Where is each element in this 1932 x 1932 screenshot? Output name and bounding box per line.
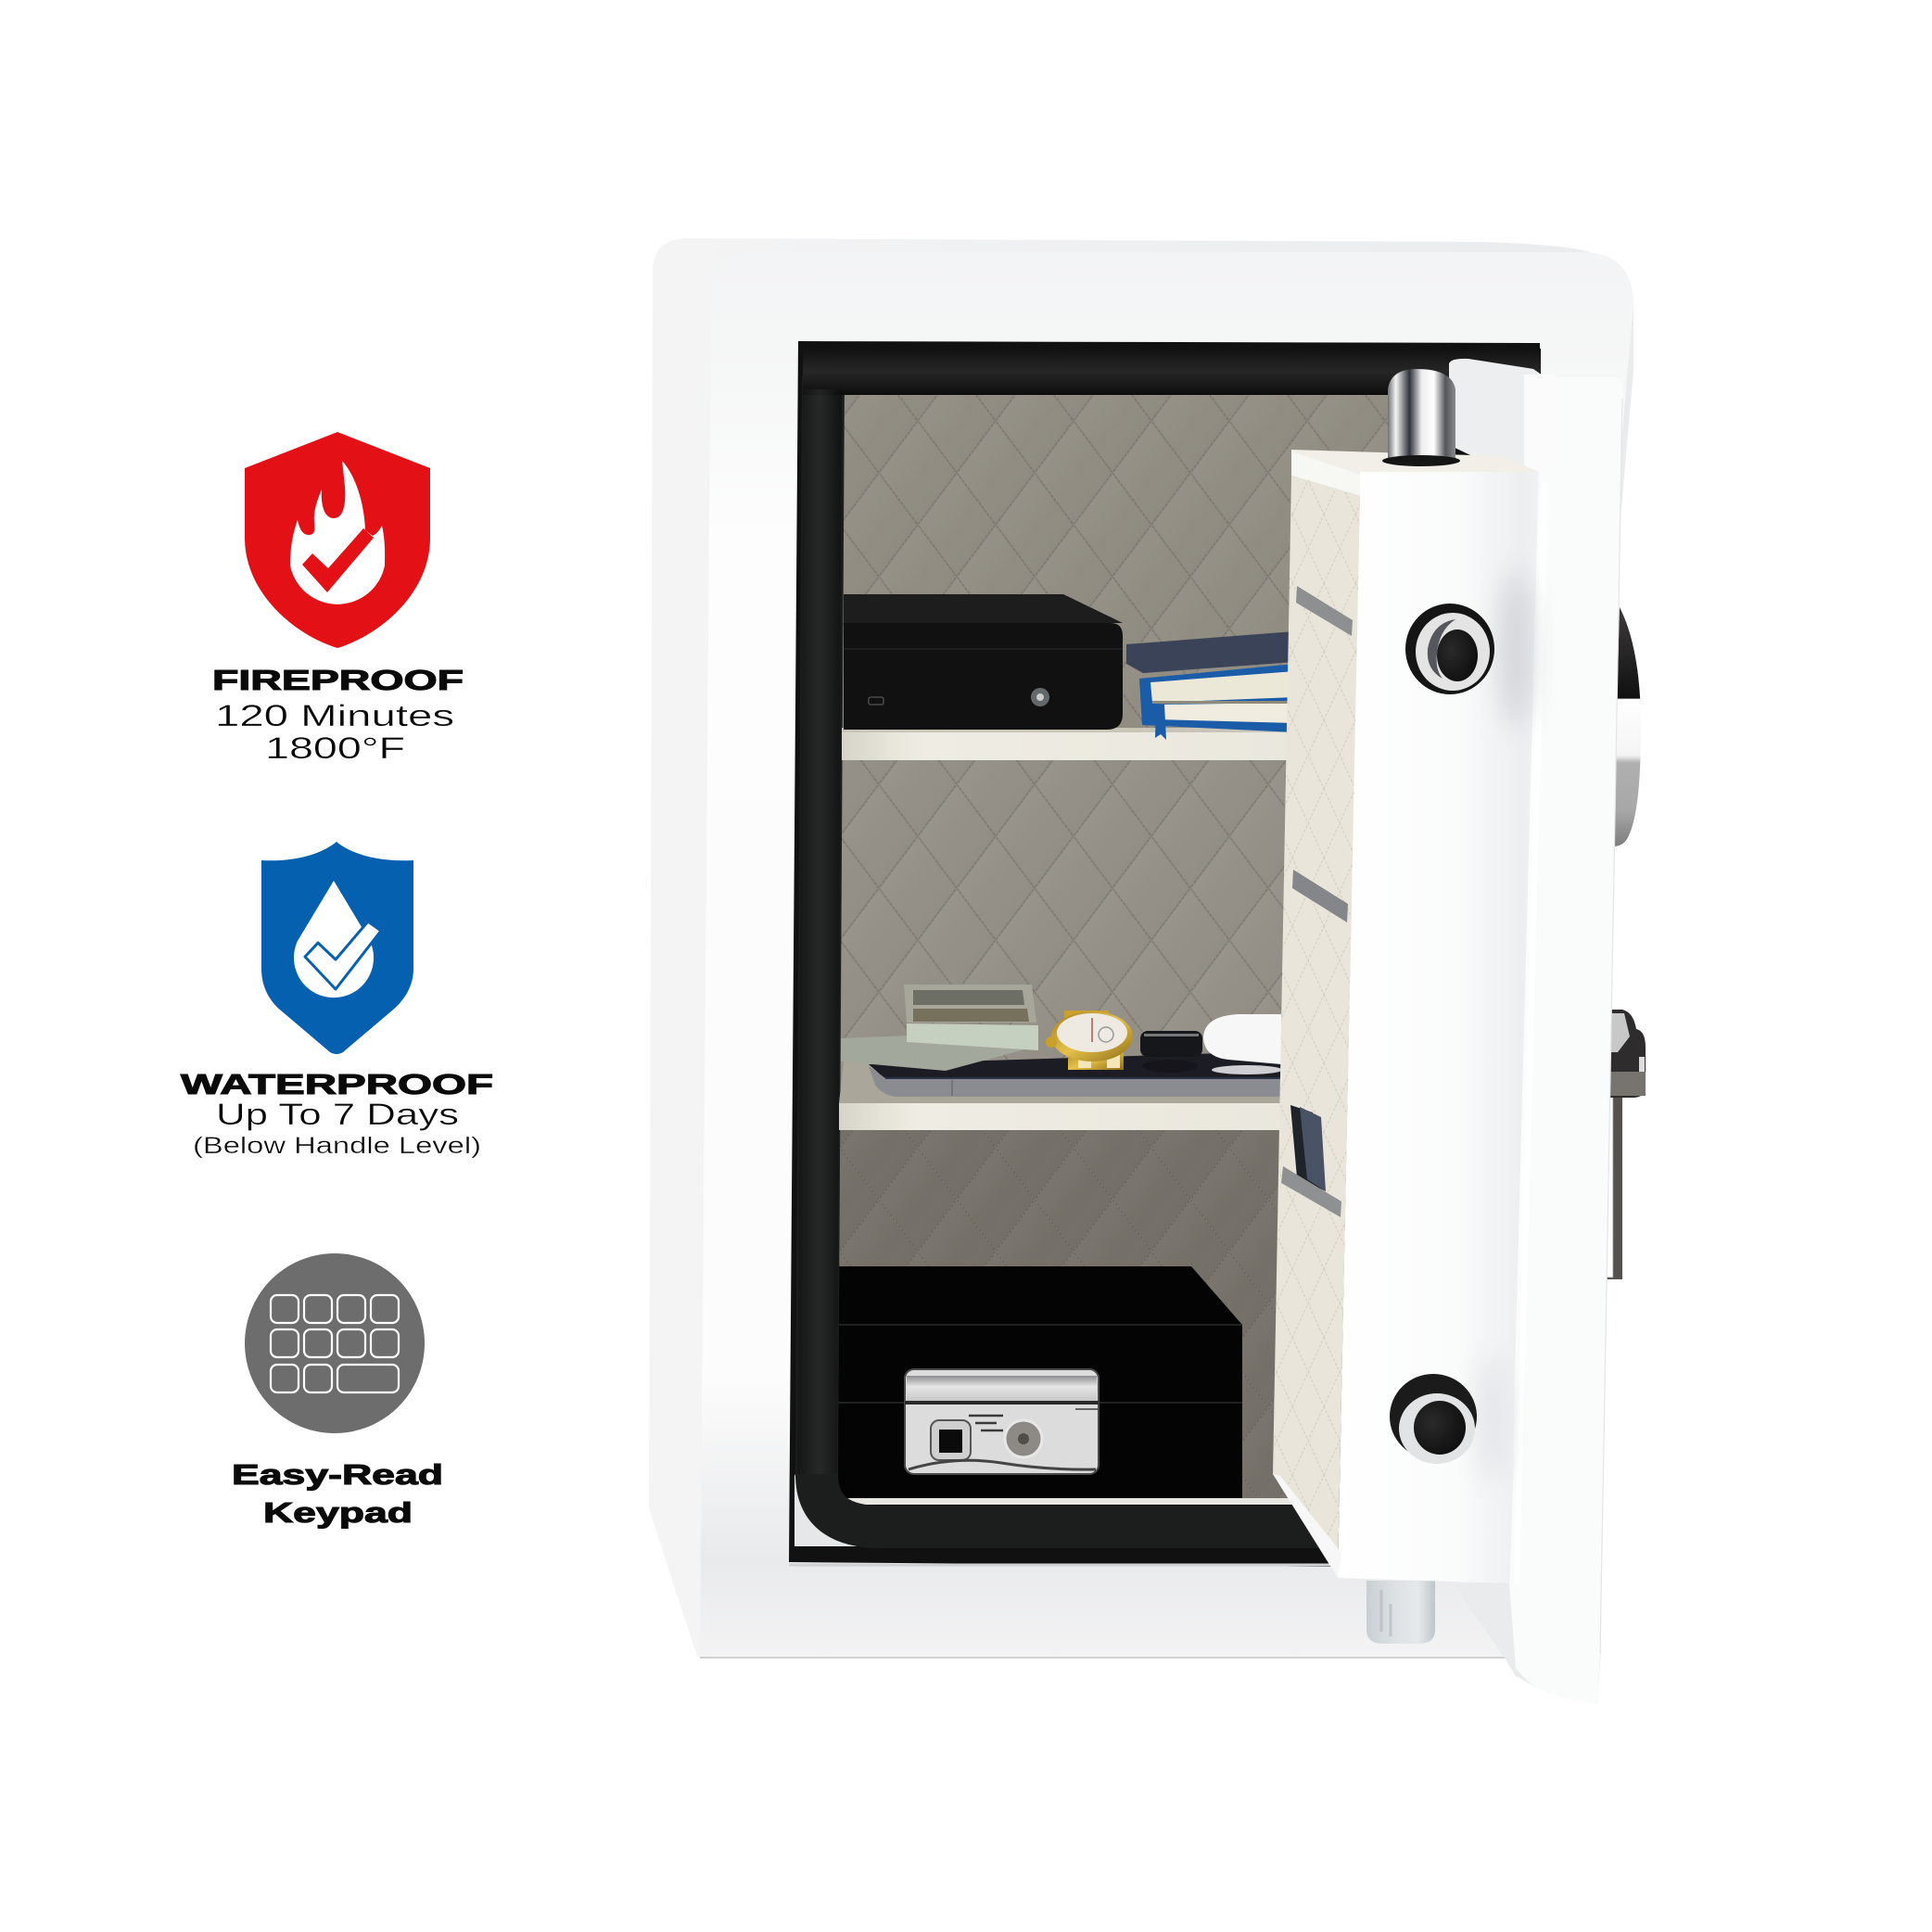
door top edge xyxy=(1291,450,1539,476)
locking bolt: top xyxy=(1382,369,1460,466)
door bottom lip xyxy=(1273,1474,1341,1578)
heading: waterproof: WATERPROOF xyxy=(181,1068,493,1100)
door underside flange xyxy=(1453,1582,1601,1704)
door inner quilted panel xyxy=(1273,451,1360,1578)
item: laptop xyxy=(869,1051,1281,1097)
item: silver notebook xyxy=(841,1034,1038,1071)
heading: fireproof: FIREPROOF xyxy=(212,664,464,696)
door knob: upper xyxy=(1405,604,1494,694)
soft shadow beside upper knob xyxy=(1499,570,1532,728)
safe body xyxy=(649,238,1633,1658)
lower storage box xyxy=(838,1266,1242,1498)
heading: easy-read: Easy-Read xyxy=(232,1458,443,1491)
item: gold watch xyxy=(1046,1010,1133,1070)
item: white pouch xyxy=(1203,1014,1282,1074)
text: water rating duration: Up To 7 Days xyxy=(216,1098,459,1131)
panel: fireproof feature xyxy=(212,432,464,765)
text: water rating note: (Below Handle Level) xyxy=(193,1133,481,1159)
soft shadow beside lower knob xyxy=(1478,1354,1507,1483)
corner reflection xyxy=(794,1474,862,1546)
panel: waterproof feature xyxy=(181,842,493,1159)
item: blue notebooks xyxy=(1126,631,1295,740)
pocket strap: middle xyxy=(1292,870,1348,922)
door right strip xyxy=(1509,377,1623,1704)
door upper step xyxy=(1449,359,1555,472)
panel: keypad feature xyxy=(232,1253,443,1529)
door seal gasket xyxy=(797,349,1541,1527)
safe opening xyxy=(789,341,1541,1567)
item: black cash box xyxy=(844,594,1123,730)
icon: water shield xyxy=(261,842,413,1054)
icon: door handle xyxy=(1606,1010,1646,1279)
text: fire rating duration: 120 Minutes xyxy=(215,699,454,732)
safe floor strip xyxy=(839,1498,1303,1505)
icon: electronic dial xyxy=(1613,607,1641,846)
panel: open door xyxy=(1261,359,1646,1704)
icon: keypad circle xyxy=(245,1253,425,1433)
item: cash stack xyxy=(904,985,1038,1050)
safe infographic canvas xyxy=(180,238,1646,1700)
heading: keypad: Keypad xyxy=(263,1496,413,1529)
shelf: upper xyxy=(842,728,1296,760)
interior back wall, middle xyxy=(839,756,1303,1103)
icon: fire shield xyxy=(245,432,430,648)
shelf: lower xyxy=(839,1061,1283,1130)
interior back wall, bottom xyxy=(839,1129,1293,1500)
pocket strap: top xyxy=(1296,586,1353,636)
item: black key fob xyxy=(1140,1031,1202,1073)
door front face xyxy=(1338,472,1539,1583)
box chrome latch xyxy=(905,1369,1099,1474)
locking bolt: bottom xyxy=(1366,1581,1435,1644)
interior back wall, top xyxy=(839,395,1414,732)
door card pocket xyxy=(1281,1105,1341,1217)
panel: open safe xyxy=(649,238,1633,1658)
text: fire rating temperature: 1800°F xyxy=(265,731,405,765)
door knob: lower xyxy=(1390,1374,1477,1464)
